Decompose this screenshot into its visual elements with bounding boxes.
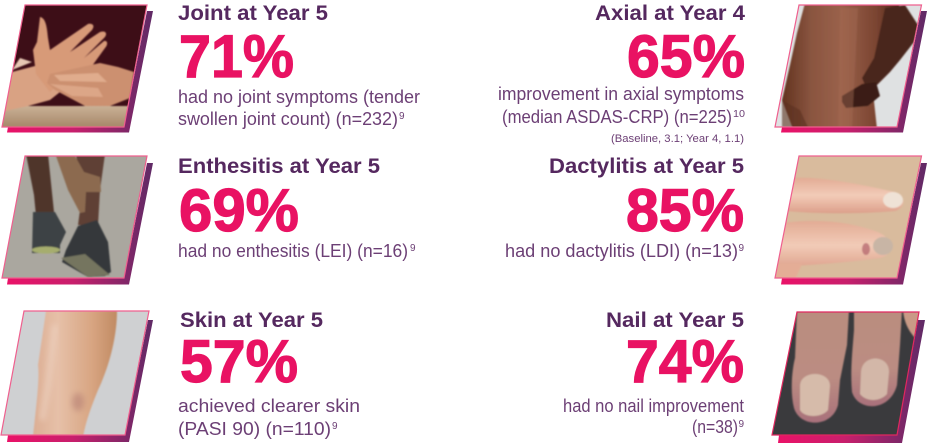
- text: nail description: 9: [738, 419, 744, 430]
- text: nail description: had no nail improvement: [563, 396, 744, 416]
- heading: axial: Axial at Year 4: [595, 2, 745, 25]
- text: axial description: (median ASDAS-CRP) (n=225): [502, 107, 732, 127]
- text: joint description: 9: [399, 111, 405, 122]
- photo: fingernails: [770, 310, 925, 443]
- text: skin description: achieved clearer skin: [178, 396, 360, 416]
- text: enthesitis description: had no enthesitis (LEI) (n=16): [178, 241, 408, 261]
- heading: skin: Skin at Year 5: [180, 309, 323, 332]
- stat: 74%: 74%: [626, 328, 744, 395]
- text: skin description: [178, 396, 360, 439]
- text: axial description: 10: [733, 109, 745, 120]
- heading: nail: Nail at Year 5: [606, 309, 744, 332]
- stat: 65%: 65%: [627, 23, 745, 90]
- text: nail description: [563, 396, 744, 437]
- photo: man holding lower back: [770, 3, 927, 132]
- photo: hands with joint symptoms: [0, 3, 153, 132]
- text: enthesitis description: 9: [410, 243, 416, 254]
- stat: 85%: 85%: [626, 177, 744, 244]
- panel: joint at year 5: [0, 2, 420, 132]
- photo: runner holding calf: [0, 154, 153, 284]
- panel: skin at year 5: [0, 309, 360, 442]
- text: dactylitis description: 9: [738, 243, 744, 254]
- text: joint description: [178, 87, 420, 129]
- text: axial description: improvement in axial symptoms: [498, 84, 744, 104]
- stat: 71%: 71%: [179, 23, 294, 90]
- text: joint description: swollen joint count) (n=232): [178, 109, 398, 129]
- stat: 57%: 57%: [180, 328, 298, 395]
- panel: nail at year 5: [563, 309, 925, 443]
- text: axial description: [498, 84, 745, 145]
- text: dactylitis description: had no dactylitis (LDI) (n=13): [505, 241, 738, 261]
- text: joint description: had no joint symptoms (tender: [178, 87, 420, 107]
- photo: swollen fingers: [770, 154, 927, 284]
- panel: dactylitis at year 5: [505, 154, 927, 284]
- photo: leg with skin lesion: [0, 309, 153, 442]
- text: skin description: 9: [332, 421, 338, 432]
- text: skin description: (PASI 90) (n=110): [178, 419, 331, 439]
- text: axial description: (Baseline, 3.1; Year 4, 1.1): [611, 133, 744, 145]
- panel: enthesitis at year 5: [0, 154, 416, 284]
- heading: joint: Joint at Year 5: [178, 2, 328, 25]
- text: nail description: (n=38): [692, 417, 738, 437]
- heading: dactylitis: Dactylitis at Year 5: [549, 155, 744, 178]
- panel: axial at year 4: [498, 2, 927, 145]
- stat: 69%: 69%: [179, 177, 299, 244]
- heading: enthesitis: Enthesitis at Year 5: [178, 155, 380, 178]
